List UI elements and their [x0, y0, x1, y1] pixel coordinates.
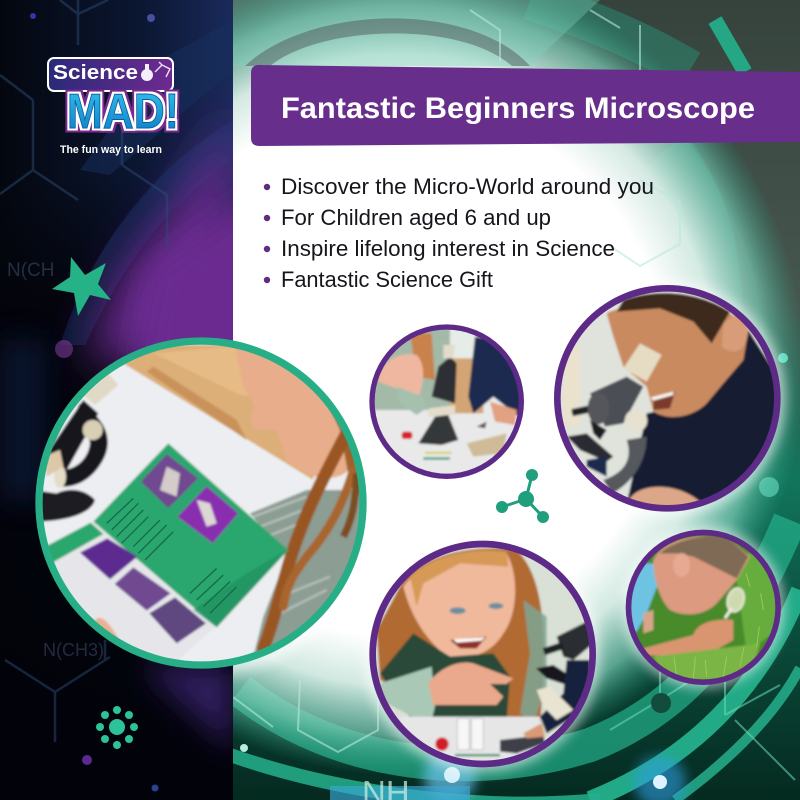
icon: green dotted cluster: [96, 706, 138, 749]
photo glow shadows: [233, 282, 794, 780]
bullet list: [264, 174, 654, 292]
logo MAD wordmark: MAD!: [67, 85, 179, 139]
photo: children with microscope on table: [369, 323, 524, 479]
panel: dark left background: [0, 0, 233, 800]
bullet: discover: Discover the Micro-World around you: [281, 174, 654, 199]
photo: boy with magnifying glass in grass: [626, 530, 781, 685]
photo: smiling girl with microscope: [369, 540, 596, 770]
panel: white and green right background: [230, 0, 800, 800]
icon: green star: [52, 257, 111, 316]
bullet: gift: Fantastic Science Gift: [281, 267, 493, 292]
photo: boy looking through microscope: [553, 285, 787, 513]
photo: girl reading booklet with microscope: [33, 337, 367, 669]
bullet: age range: For Children aged 6 and up: [281, 205, 551, 230]
logo top badge: Science: [53, 62, 138, 84]
label: faint chemical formula left: N(CH: [7, 260, 54, 281]
brand logo: [48, 58, 179, 156]
label: faint chemical formula lower left: N(CH3): [43, 640, 104, 660]
logo tagline: The fun way to learn: [60, 144, 162, 156]
title banner: [251, 65, 800, 146]
title text: Fantastic Beginners Microscope: [281, 92, 755, 125]
bullet: inspire: Inspire lifelong interest in Science: [281, 236, 615, 261]
icon: green molecule: [496, 469, 549, 523]
